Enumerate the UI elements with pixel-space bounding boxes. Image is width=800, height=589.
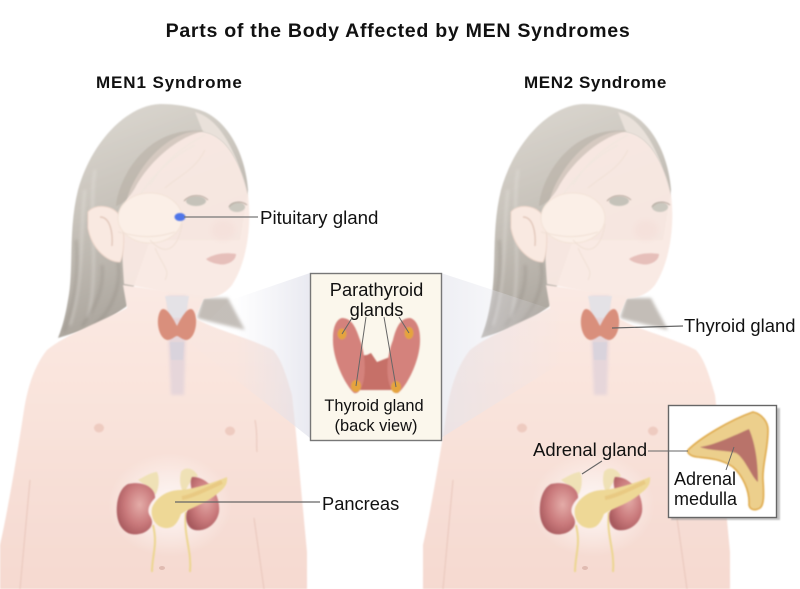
pituitary label line	[184, 216, 258, 218]
label: Pancreas: Pancreas	[322, 493, 399, 514]
label: Thyroid gland back view: Thyroid gland	[324, 397, 424, 415]
adrenal medulla leader line	[726, 447, 734, 470]
heading: MEN2 Syndrome: MEN2 Syndrome	[524, 73, 667, 92]
label: Parathyroid glands: glands	[350, 299, 403, 320]
illustration: MEN1 child	[0, 104, 307, 589]
label: Pituitary gland: Pituitary gland	[260, 207, 378, 228]
thyroid label line	[612, 326, 683, 328]
label: Thyroid gland: Thyroid gland	[684, 315, 795, 336]
label: Adrenal medulla: medulla	[674, 489, 738, 509]
illustration: MEN2 child	[423, 104, 730, 589]
title: Parts of the Body Affected by MEN Syndromes	[166, 20, 630, 42]
heading: MEN1 Syndrome: MEN1 Syndrome	[96, 73, 243, 92]
label: Parathyroid glands: Parathyroid	[330, 279, 423, 300]
parathyroid leader lines	[342, 317, 409, 387]
thyroid gland back view	[333, 318, 420, 393]
icon: pituitary gland	[174, 213, 186, 221]
inset panel: thyroid back view	[310, 274, 442, 440]
callout fan: right	[441, 273, 590, 438]
callout fan: left	[188, 273, 310, 438]
adrenal label lines	[582, 451, 688, 474]
label: Thyroid gland back view: (back view)	[335, 417, 417, 435]
label: Adrenal medulla: Adrenal	[674, 469, 736, 489]
adrenal cross-section	[688, 412, 768, 510]
inset panel: adrenal gland cross-section	[668, 406, 780, 520]
pancreas label line	[175, 501, 320, 503]
label: Adrenal gland: Adrenal gland	[533, 439, 647, 460]
